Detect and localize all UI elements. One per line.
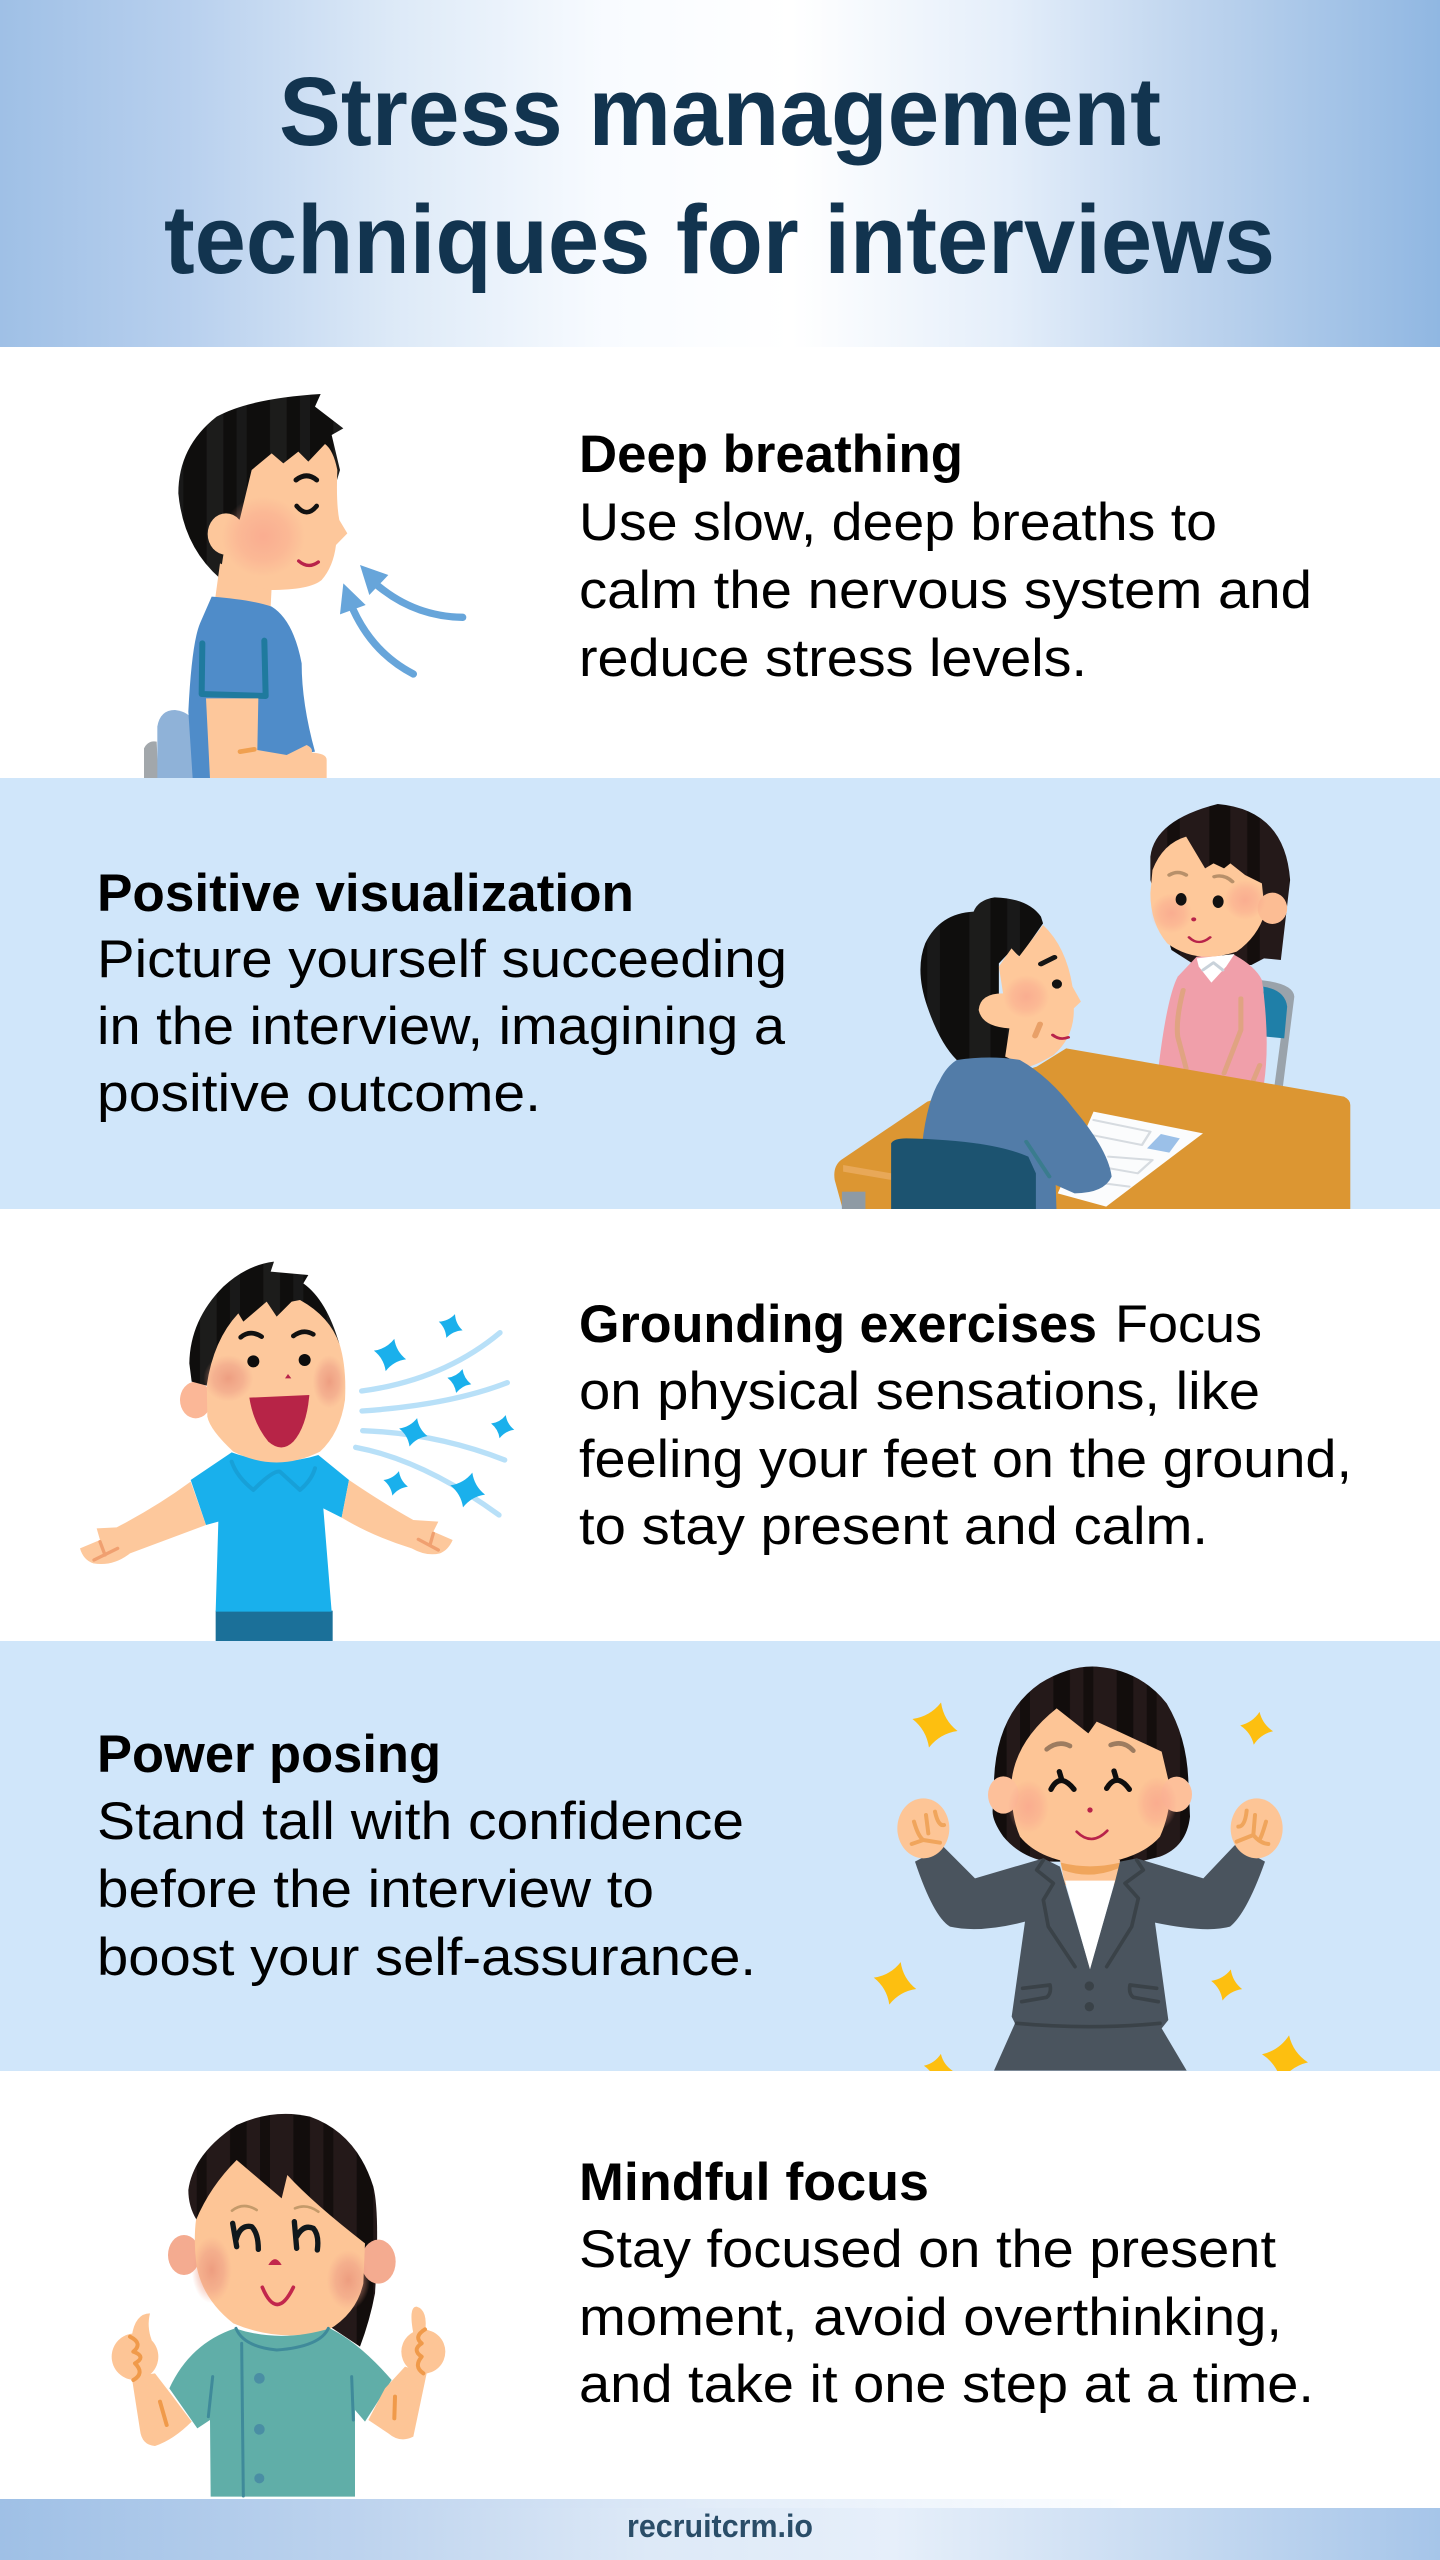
text: grounding exercises <box>579 1295 1352 1556</box>
text: grounding exercises: feeling your feet on the ground, <box>579 1430 1352 1489</box>
text: mindful focus <box>579 2153 1314 2414</box>
panel: power posing <box>0 1641 1440 2085</box>
header banner <box>0 0 1440 347</box>
text: positive visualization: in the interview, imagining a <box>97 997 786 1056</box>
illustration: woman giving thumbs up <box>112 2114 445 2497</box>
illustration: boy exhaling with sparkles <box>80 1262 517 1641</box>
footer text: website: recruitcrm.io <box>627 2508 813 2544</box>
text: deep breathing: calm the nervous system and <box>579 561 1312 620</box>
panel: deep breathing <box>0 347 1440 778</box>
panel: mindful focus <box>0 2071 1440 2499</box>
title: techniques for interviews <box>164 185 1275 294</box>
icon: fresh breath lines and sparkles <box>356 1310 517 1515</box>
panel: grounding exercises <box>0 1209 1440 1641</box>
text: power posing <box>97 1725 756 1987</box>
title: Stress management <box>279 57 1161 166</box>
title <box>164 57 1275 294</box>
text: grounding exercises: Focus <box>1115 1295 1262 1354</box>
text: deep breathing <box>579 425 1312 688</box>
text: positive visualization: Positive visualization <box>97 864 634 923</box>
illustration: job interview at desk <box>834 804 1350 1211</box>
text: positive visualization: positive outcome. <box>97 1064 541 1123</box>
text: power posing: Power posing <box>97 1725 441 1784</box>
text: positive visualization <box>97 864 787 1123</box>
text: mindful focus: Mindful focus <box>579 2153 929 2212</box>
text: mindful focus: Stay focused on the present <box>579 2220 1276 2279</box>
text: mindful focus: moment, avoid overthinking, <box>579 2288 1282 2347</box>
text: power posing: before the interview to <box>97 1860 654 1919</box>
illustration: man breathing in <box>144 394 463 778</box>
text: power posing: boost your self-assurance. <box>97 1928 756 1987</box>
text: grounding exercises: on physical sensations, like <box>579 1362 1260 1421</box>
text: grounding exercises: Grounding exercises <box>579 1295 1097 1354</box>
icon: breath arrows <box>340 565 463 674</box>
illustration: woman in suit with raised fists <box>868 1667 1312 2085</box>
footer band <box>0 2499 1440 2560</box>
text: deep breathing: reduce stress levels. <box>579 629 1087 688</box>
text: grounding exercises: to stay present and calm. <box>579 1497 1208 1556</box>
text: mindful focus: and take it one step at a time. <box>579 2355 1314 2414</box>
text: positive visualization: Picture yourself succeeding <box>97 930 787 989</box>
text: deep breathing: Use slow, deep breaths to <box>579 493 1217 552</box>
panel: positive visualization <box>0 778 1440 1211</box>
text: power posing: Stand tall with confidence <box>97 1792 744 1851</box>
text: deep breathing: Deep breathing <box>579 425 963 484</box>
